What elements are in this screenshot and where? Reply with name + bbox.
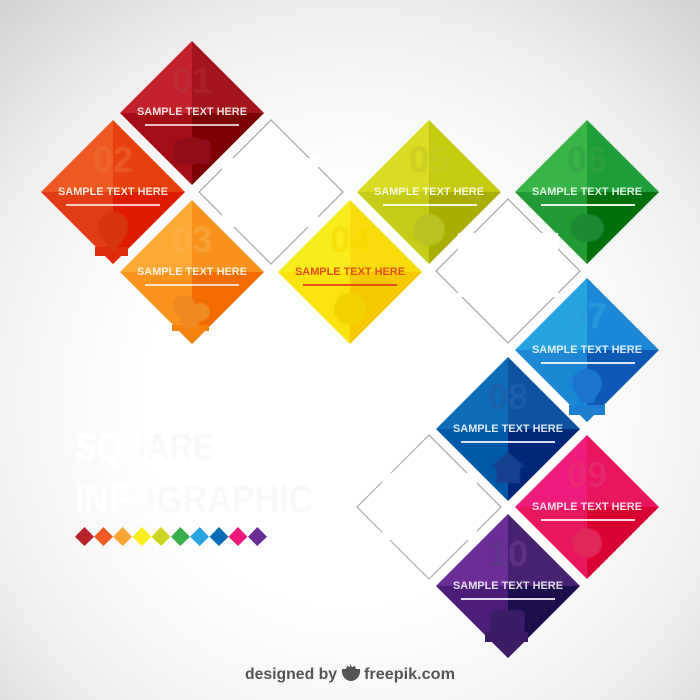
label 03: SAMPLE TEXT HERE [137,266,247,278]
icon 02 pin [98,212,128,253]
label 04: SAMPLE TEXT HERE [295,266,405,278]
diamond 03 orange [120,200,264,344]
diamond 05 lime [357,120,501,264]
icon 05 badge [413,214,445,246]
label 06: SAMPLE TEXT HERE [532,186,642,198]
number 01: 01 [172,60,212,101]
diamond 07 light blue [515,278,659,422]
rule 04 [303,284,397,286]
label 09: SAMPLE TEXT HERE [532,501,642,513]
diamond 06 green [515,120,659,264]
footer credit [245,664,455,683]
colour swatch row [75,527,267,546]
number 10: 10 [488,533,528,574]
artifact block 10 [485,632,528,658]
artifact block 07 [569,405,605,422]
rule 03 [145,284,239,286]
artifact block 03 [172,325,209,344]
title: SQUARE [75,427,215,469]
rule 07 [541,362,635,364]
rule 05 [383,204,477,206]
artifact block 02 [95,247,128,264]
diamond 02 orange-red [41,120,185,264]
diamond 09 pink [515,435,659,579]
number 05: 05 [409,139,449,180]
footer credit: freepik.com [364,666,455,683]
rule 02 [66,204,160,206]
icon 06 speech bubble [570,214,604,242]
title: INFOGRAPHIC [75,479,313,521]
number 02: 02 [93,139,133,180]
label 10: SAMPLE TEXT HERE [453,580,563,592]
number 04: 04 [330,219,370,260]
number 08: 08 [488,376,528,417]
number 06: 06 [567,139,607,180]
rule 01 [145,124,239,126]
white panel C [357,435,501,579]
icon 09 badge [572,528,602,558]
white panel B [436,199,580,343]
rule 06 [541,204,635,206]
icon 03 gears [173,295,210,329]
panel B text: SAMPLE TEXT [469,246,547,258]
label 02: SAMPLE TEXT HERE [58,186,168,198]
footer credit: designed by [245,666,337,683]
rule 10 [461,598,555,600]
number 07: 07 [567,295,607,336]
icon: freepik mascot [342,664,360,681]
diamond 08 blue [436,357,580,501]
label 01: SAMPLE TEXT HERE [137,106,247,118]
label 08: SAMPLE TEXT HERE [453,423,563,435]
icon 07 bulb [572,369,602,403]
diamond 10 purple [436,514,580,658]
rule 08 [461,441,555,443]
icon 04 circle [334,293,366,325]
number 09: 09 [567,454,607,495]
label 07: SAMPLE TEXT HERE [532,344,642,356]
label 05: SAMPLE TEXT HERE [374,186,484,198]
white panel A [199,120,343,264]
number 03: 03 [172,219,212,260]
title [75,427,313,521]
diamond 01 red [120,41,264,185]
icon 01 flower [173,137,211,165]
diamond 04 yellow [278,200,422,344]
panel A text: SAMPLE TEXT [232,169,310,181]
icon 08 house [491,452,525,483]
panel C text: SAMPLE TEXT [390,481,468,493]
rule 09 [541,519,635,521]
icon 10 shape [491,610,525,634]
